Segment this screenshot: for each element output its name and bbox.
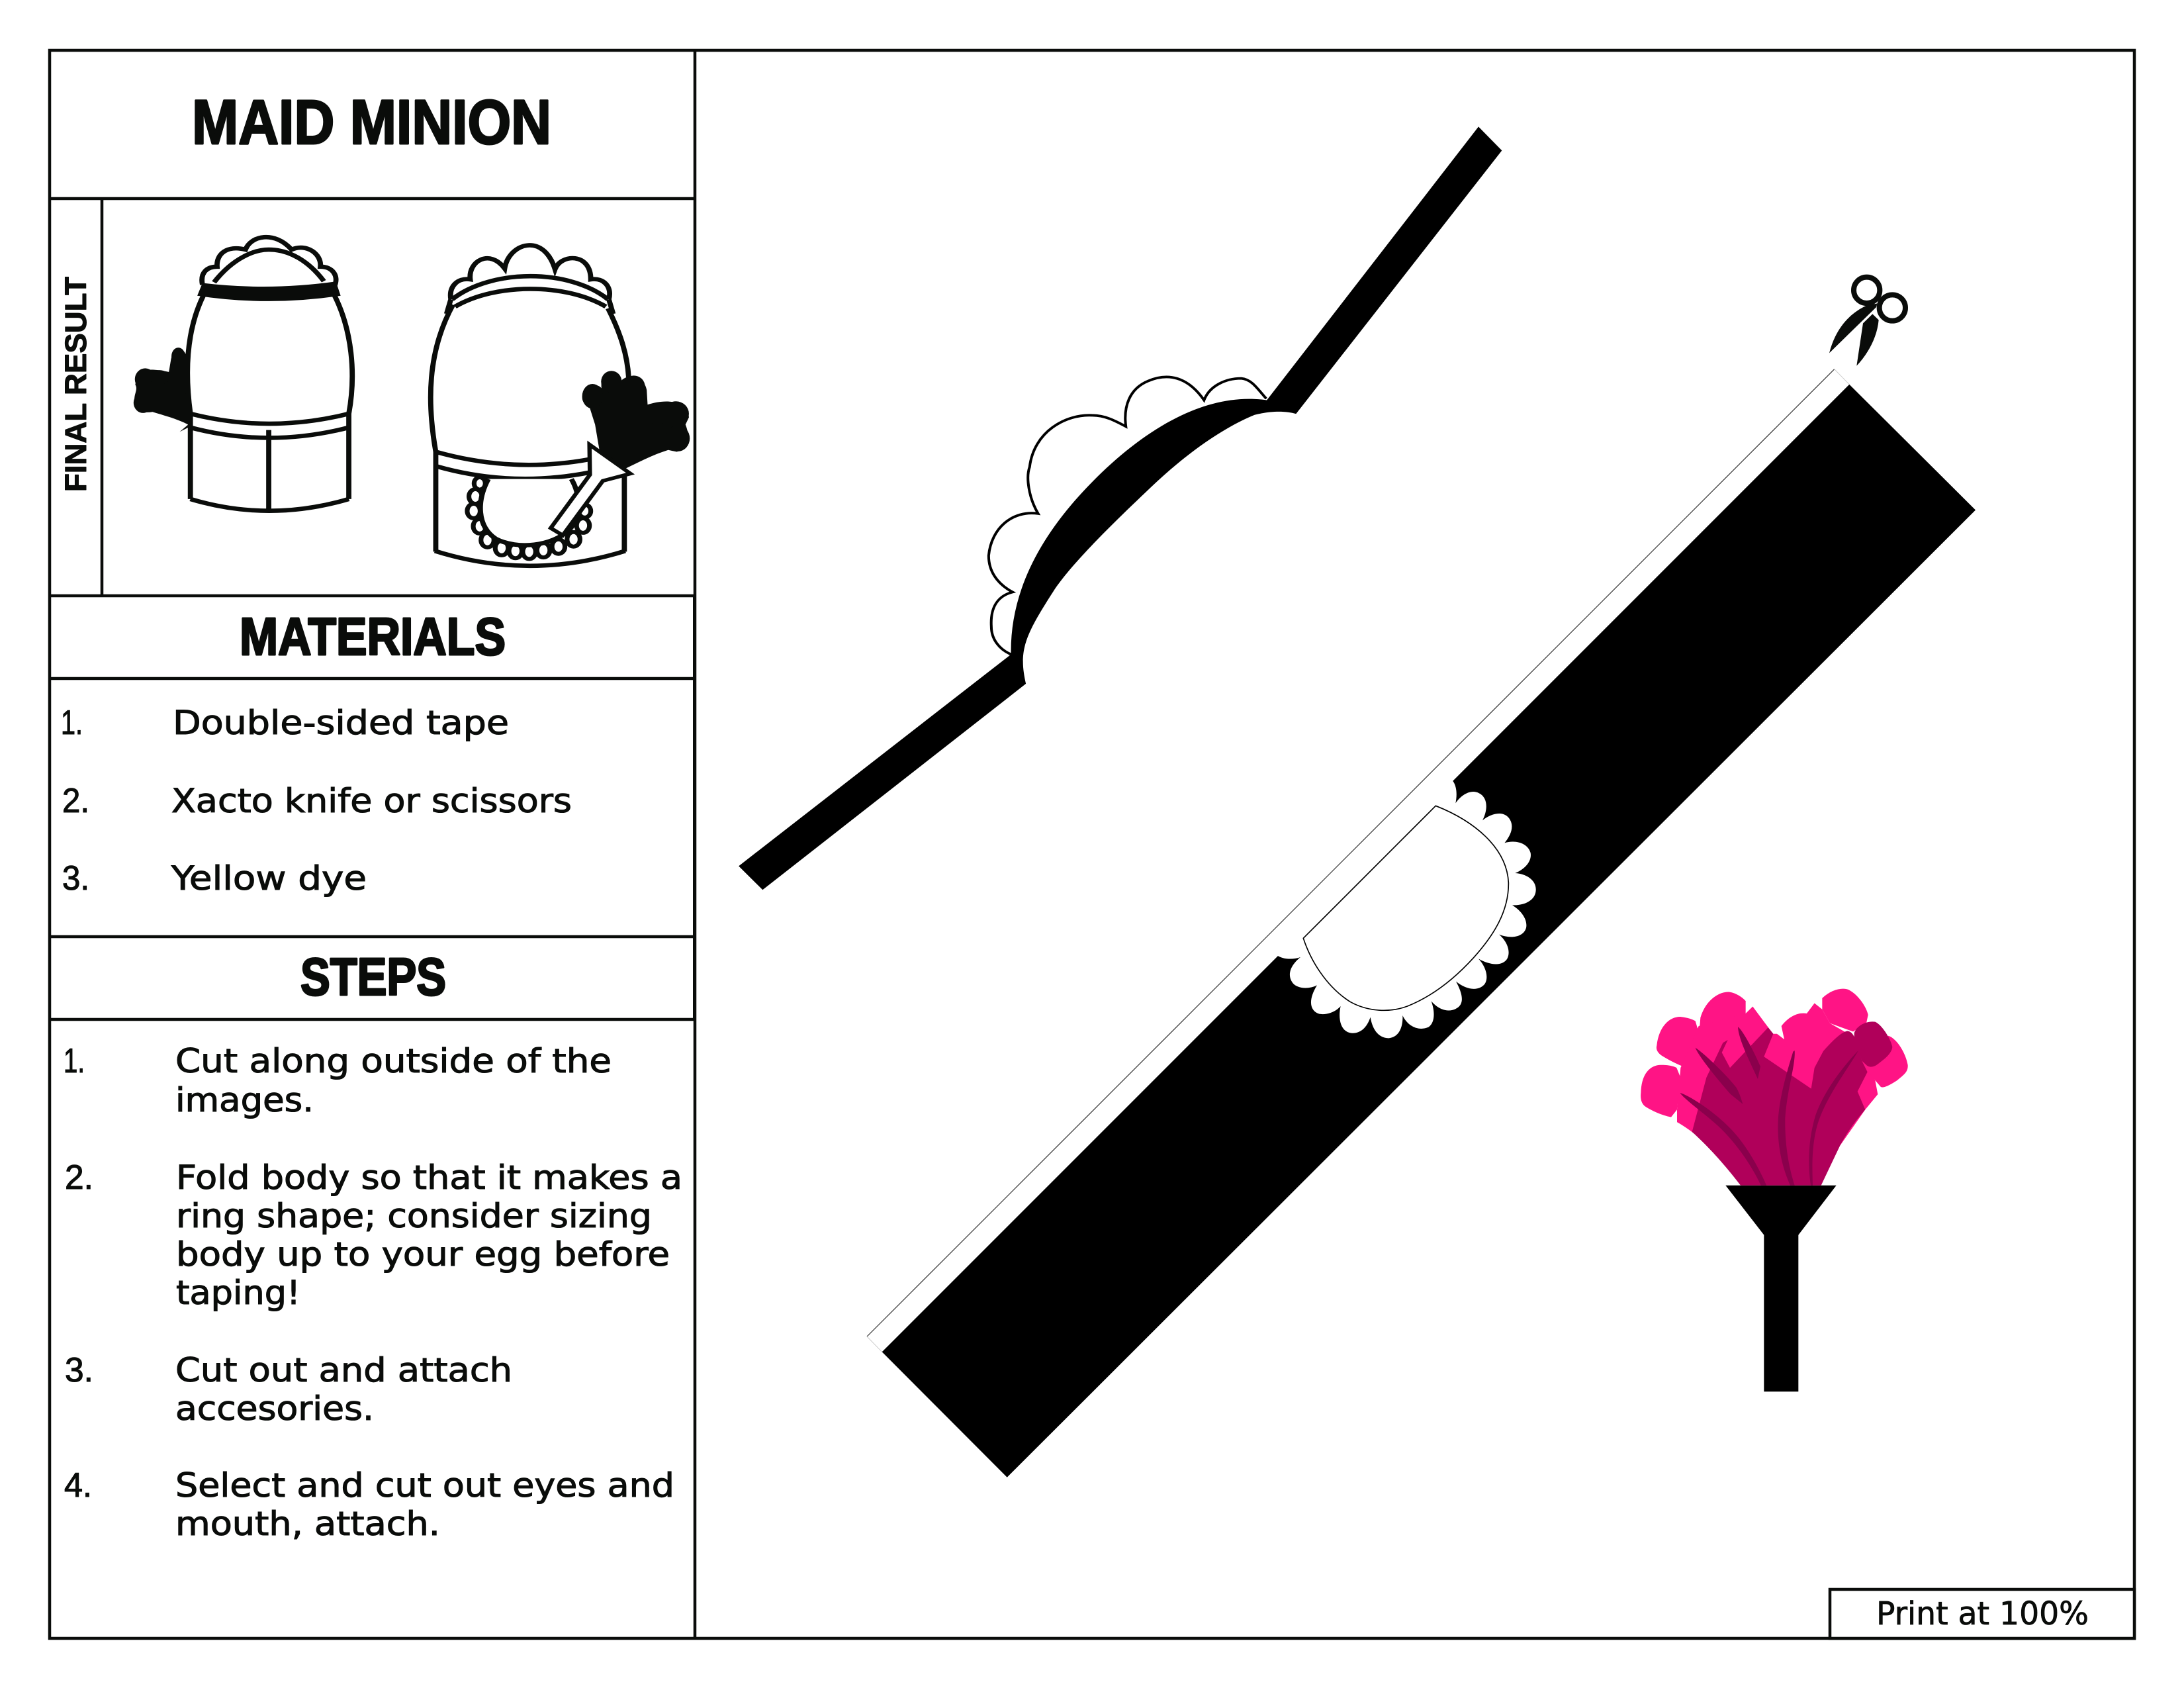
apron outline (1303, 806, 1508, 1010)
figure: minion front view (134, 237, 352, 511)
list: materials: 1. (61, 704, 83, 742)
list: steps: images. (175, 1081, 314, 1119)
list: steps: Select and cut out eyes and (175, 1466, 674, 1505)
thick headband (197, 281, 341, 301)
list: materials: 2. (62, 782, 89, 820)
icon: black feather duster on the left (134, 348, 191, 432)
list: steps: 3. (65, 1351, 93, 1389)
dark feather mass (1692, 1027, 1868, 1186)
list: steps: 2. (65, 1158, 93, 1197)
black strip (882, 385, 1976, 1477)
list: steps: body up to your egg before (176, 1235, 670, 1274)
list: steps: Cut out and attach (175, 1351, 512, 1389)
list: materials: Yellow dye (171, 859, 367, 898)
icon: scissors (1829, 277, 1905, 366)
label: final result: FINAL RESULT (59, 277, 93, 492)
list: steps (64, 1042, 682, 1543)
headband scallops (202, 237, 336, 286)
figure: minion back view with apron (431, 245, 690, 566)
list: materials (61, 704, 572, 898)
list: steps: Cut along outside of the (175, 1042, 612, 1080)
waist and skirt (435, 452, 625, 566)
list: steps: 4. (64, 1466, 92, 1505)
note: print at 100%: Print at 100% (1876, 1595, 2089, 1632)
list: steps: ring shape; consider sizing (176, 1197, 652, 1235)
headband and scallops (447, 245, 613, 314)
scalloped apron (1275, 778, 1536, 1038)
cut-out: pink feather duster (1641, 989, 1908, 1391)
feather strokes (1680, 1027, 1858, 1186)
egg body (431, 305, 629, 452)
title: MAID MINION (192, 87, 551, 158)
note: print at 100% (1830, 1589, 2134, 1638)
egg body (187, 296, 352, 414)
dark feather tip (1854, 1021, 1892, 1067)
list: materials: Double-sided tape (173, 704, 509, 742)
black strap and band (739, 126, 1502, 890)
list: steps: 1. (64, 1042, 85, 1080)
list: materials: Xacto knife or scissors (171, 782, 572, 820)
apron (480, 479, 578, 545)
list: steps: mouth, attach. (175, 1505, 440, 1543)
waist band and skirt (191, 414, 349, 511)
pink feathers (1641, 989, 1908, 1185)
list: steps: taping! (176, 1274, 300, 1312)
list: materials: 3. (62, 859, 89, 898)
scalloped cap outline (989, 377, 1266, 655)
list: steps: accesories. (175, 1389, 374, 1428)
list: steps: Fold body so that it makes a (176, 1158, 682, 1197)
duster handle (1725, 1186, 1837, 1391)
heading: steps: STEPS (300, 947, 446, 1006)
icon: black feather duster on the right (582, 371, 690, 472)
cut-out: long black body strip (867, 369, 1976, 1477)
apron scallops (467, 477, 591, 559)
heading: materials: MATERIALS (240, 607, 506, 666)
faint end caps (867, 369, 1849, 1352)
thin cut line (867, 369, 1835, 1336)
arrow: duster handle (551, 445, 630, 536)
cut-out: headband with scalloped cap (739, 126, 1502, 890)
